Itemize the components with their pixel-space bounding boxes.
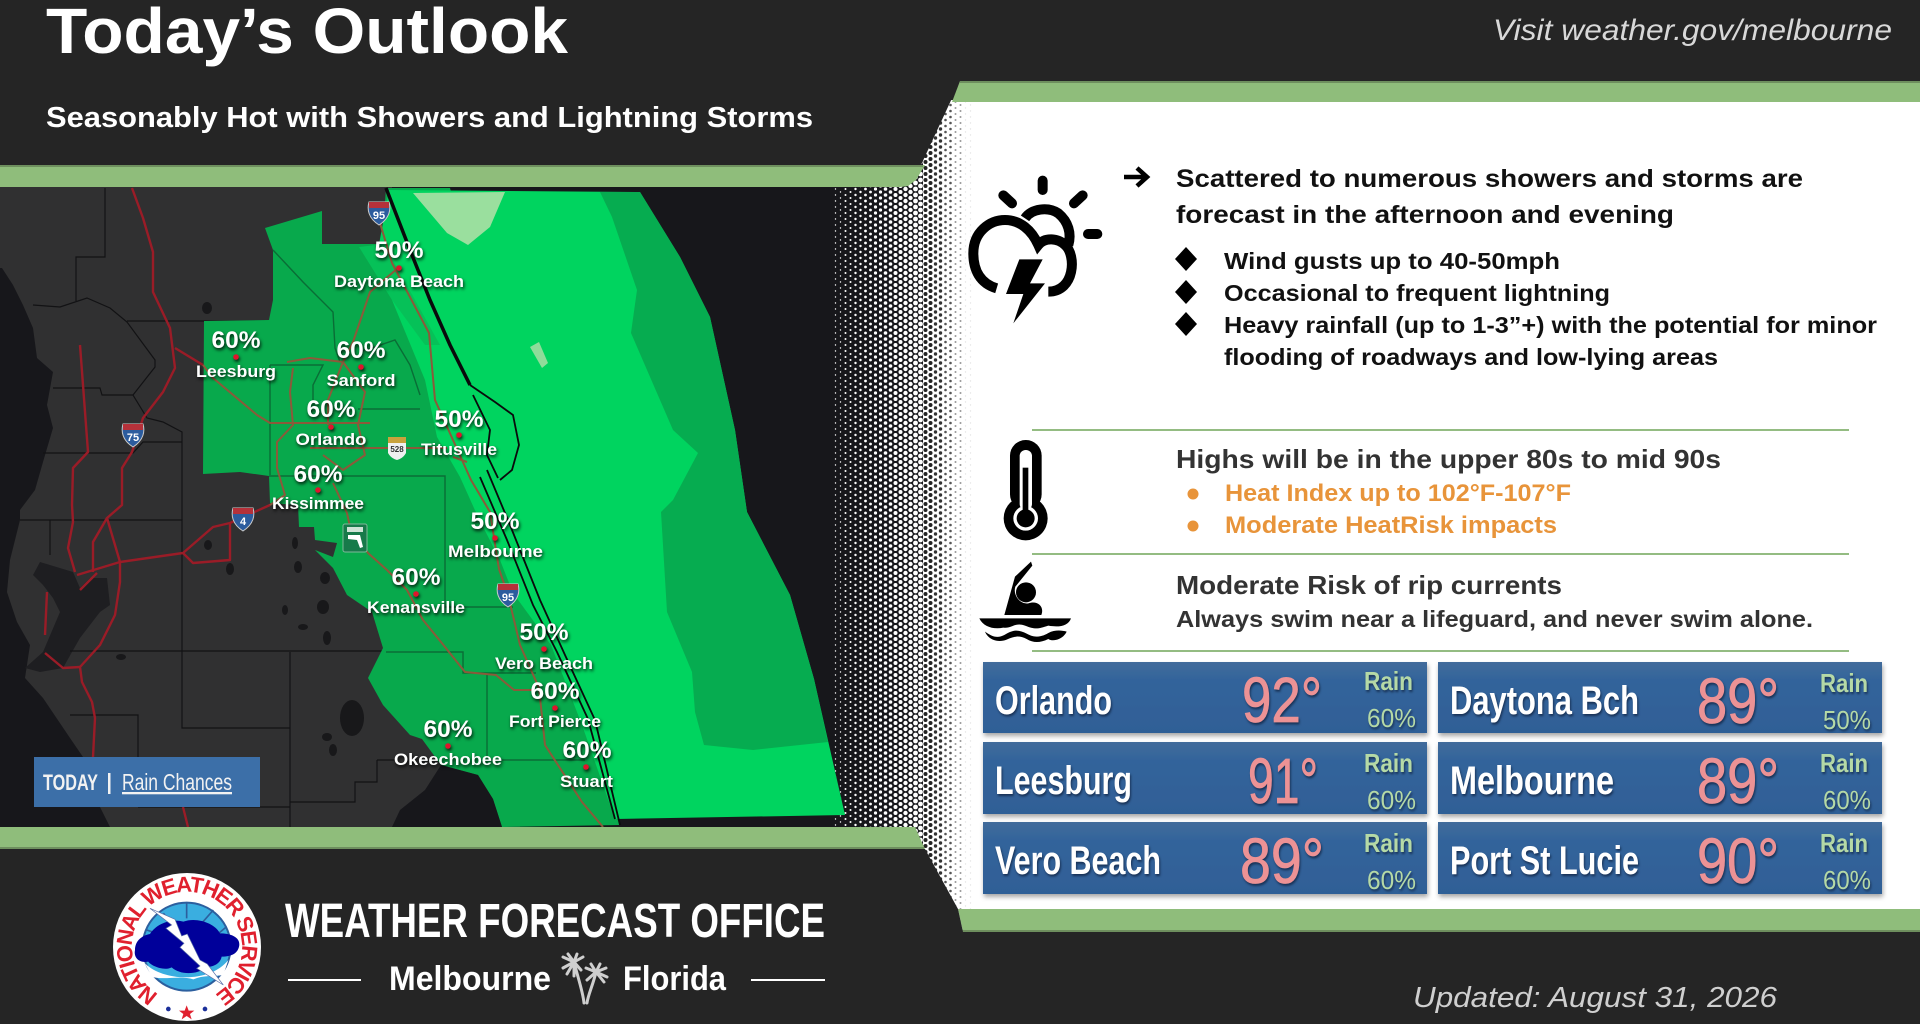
- label: Kissimmee: Kissimmee: [272, 494, 364, 513]
- city card: Port St Lucie: 60%: [1823, 865, 1871, 895]
- icon: interstate 4 shield: [232, 508, 254, 531]
- icon: route 528 shield: [388, 437, 406, 460]
- office location line: Florida: [623, 960, 727, 998]
- map tag: today rain chances: Rain Chances: [122, 769, 232, 795]
- city card: Orlando: 92°: [1242, 664, 1322, 736]
- header panel: [0, 0, 1920, 165]
- label: Titusville: Titusville: [421, 440, 497, 459]
- footer panel: [0, 849, 1920, 1024]
- label: Vero Beach: Vero Beach: [495, 654, 593, 673]
- label: Okeechobee: Okeechobee: [394, 750, 502, 769]
- map: pale lower-chance area: [413, 192, 505, 245]
- city card: Orlando: Rain: [1364, 666, 1413, 696]
- website link text: Visit weather.gov/melbourne: [1493, 14, 1892, 47]
- city card: Orlando: 60%: [1367, 703, 1416, 733]
- city card: Vero Beach: [983, 822, 1427, 897]
- icon: palm trees: [563, 954, 607, 1003]
- map tag: today rain chances: [34, 757, 260, 807]
- city card: Port St Lucie: 90°: [1697, 825, 1779, 897]
- label: Leesburg: 60%: [212, 327, 260, 354]
- storms text block: Scattered to numerous showers and storms are: [1176, 165, 1803, 193]
- icon: swimmer: [979, 562, 1071, 642]
- map: lines over green area: [269, 250, 585, 760]
- rip current text block: Always swim near a lifeguard, and never swim alone.: [1176, 606, 1813, 632]
- label: Okeechobee: [394, 716, 502, 769]
- map: highways on land: [45, 188, 270, 827]
- rip current text block: Moderate Risk of rip currents: [1176, 570, 1562, 600]
- city card: Daytona Bch: Rain: [1820, 668, 1868, 698]
- storms text block: forecast in the afternoon and evening: [1176, 201, 1674, 229]
- label: Leesburg: Leesburg: [196, 362, 276, 381]
- label: Vero Beach: 50%: [520, 619, 568, 646]
- city card: Daytona Bch: 89°: [1697, 665, 1779, 737]
- city card: Leesburg: 91°: [1248, 745, 1318, 817]
- storms text block: [1175, 165, 1877, 370]
- label: Fort Pierce: 60%: [530, 678, 580, 705]
- city card: Vero Beach: 89°: [1240, 825, 1324, 897]
- map: dark land: [0, 187, 520, 827]
- city card: Leesburg: Leesburg: [995, 759, 1132, 803]
- city card: Vero Beach: Vero Beach: [995, 839, 1161, 883]
- city card: Daytona Bch: Daytona Bch: [1450, 679, 1639, 723]
- icon: interstate 75 shield: 75: [127, 432, 139, 444]
- right panel bottom green stripe: [958, 909, 1920, 932]
- label: Sanford: Sanford: [326, 371, 396, 390]
- map: outer offshore band: [600, 192, 828, 750]
- city card: Vero Beach: Rain: [1364, 828, 1413, 858]
- storms text block: Wind gusts up to 40-50mph: [1224, 248, 1560, 274]
- icon: interstate 95 north shield: 95: [373, 210, 385, 222]
- map: gulf of mexico: [0, 268, 110, 827]
- city card: Leesburg: 60%: [1367, 785, 1416, 815]
- updated date: Updated: August 31, 2026: [1413, 982, 1778, 1014]
- map labels: [196, 237, 613, 791]
- heat text block: Highs will be in the upper 80s to mid 90s: [1176, 444, 1721, 474]
- map: lake okeechobee: [392, 765, 502, 827]
- label: Orlando: [296, 396, 366, 449]
- label: Titusville: [421, 406, 497, 459]
- label: Kenansville: [367, 564, 465, 617]
- city card: Melbourne: 89°: [1697, 745, 1779, 817]
- storms text block: Occasional to frequent lightning: [1224, 280, 1610, 306]
- label: Sanford: 60%: [336, 337, 386, 364]
- office location line: [288, 960, 825, 998]
- heat text block: [1176, 444, 1721, 539]
- map: inland lakes: [116, 302, 364, 756]
- icon: interstate 75 shield: [122, 424, 144, 447]
- map: tampa bay: [25, 562, 110, 672]
- label: Melbourne: 50%: [470, 508, 520, 535]
- city card: Daytona Bch: [1438, 662, 1882, 737]
- storms text block: Heavy rainfall (up to 1-3”+) with the potential for minor: [1224, 312, 1877, 338]
- map: land rain-chance area: [203, 188, 620, 827]
- map tag: today rain chances: TODAY: [43, 770, 98, 795]
- map: county lines on land: [20, 188, 395, 827]
- map: highways over green: [203, 223, 603, 827]
- label: Orlando: Orlando: [296, 430, 366, 449]
- city card: Melbourne: Rain: [1820, 748, 1868, 778]
- city card: Orlando: Orlando: [995, 679, 1112, 723]
- label: Daytona Beach: Daytona Beach: [334, 272, 464, 291]
- map: coastline: [386, 188, 620, 825]
- map: transition stripe: [359, 244, 440, 345]
- label: Titusville: 50%: [434, 406, 484, 433]
- label: Fort Pierce: Fort Pierce: [509, 712, 601, 731]
- icon: route 528 shield: 528: [390, 445, 404, 454]
- heat text block: Heat Index up to 102°F-107°F: [1225, 480, 1571, 507]
- halftone transition band: [833, 100, 973, 932]
- map: pale patch: [530, 342, 548, 368]
- city card: Port St Lucie: [1438, 822, 1882, 897]
- city card: Leesburg: Rain: [1364, 748, 1413, 778]
- label: Vero Beach: [495, 619, 593, 673]
- icon: interstate 4 shield: 4: [240, 516, 247, 528]
- city card: Melbourne: Melbourne: [1450, 759, 1614, 803]
- label: Daytona Beach: 50%: [374, 237, 424, 264]
- label: Kenansville: 60%: [392, 564, 440, 591]
- label: Okeechobee: 60%: [424, 716, 472, 743]
- rip current text block: [1176, 570, 1813, 632]
- office name wordmark: WEATHER FORECAST OFFICE: [285, 895, 825, 948]
- label: Stuart: 60%: [562, 737, 612, 764]
- header band: map top green stripe: [0, 165, 925, 187]
- icon: interstate 95 south shield: [497, 584, 519, 607]
- city card: Orlando: [983, 662, 1427, 736]
- label: Melbourne: Melbourne: [448, 542, 543, 561]
- map: offshore rain-chance area: [378, 190, 845, 819]
- icon: thermometer: [1004, 440, 1048, 540]
- city card: Port St Lucie: Port St Lucie: [1450, 839, 1639, 883]
- heat text block: Moderate HeatRisk impacts: [1225, 512, 1557, 539]
- label: Melbourne: [448, 508, 543, 561]
- right panel top green stripe: [952, 81, 1920, 102]
- label: Stuart: [560, 737, 613, 791]
- label: Orlando: 60%: [306, 396, 356, 423]
- arrow bullet: [1124, 168, 1147, 186]
- label: Fort Pierce: [509, 678, 601, 731]
- icon: nws logo: NATIONAL WEATHER SERVICE: [116, 876, 258, 1006]
- icon: florida turnpike sign: [343, 524, 367, 552]
- city card: Melbourne: 60%: [1823, 785, 1871, 815]
- city card: Leesburg: [983, 742, 1427, 817]
- rain chances map: [0, 187, 845, 827]
- icon: cloud sun lightning: [973, 181, 1097, 323]
- city card: Port St Lucie: Rain: [1820, 828, 1868, 858]
- label: Leesburg: [196, 327, 276, 381]
- subtitle: Seasonably Hot with Showers and Lightning Storms: [46, 102, 813, 134]
- storms text block: flooding of roadways and low-lying areas: [1224, 344, 1718, 370]
- icon: interstate 95 north shield: [368, 202, 390, 225]
- city card: Daytona Bch: 50%: [1823, 705, 1871, 735]
- city card: Vero Beach: 60%: [1367, 865, 1416, 895]
- label: Kissimmee: 60%: [294, 461, 342, 488]
- icon: interstate 95 south shield: 95: [502, 592, 514, 604]
- label: Kissimmee: [272, 461, 364, 513]
- white content panel background: [950, 100, 1920, 912]
- label: Sanford: [326, 337, 396, 390]
- label: Daytona Beach: [334, 237, 464, 291]
- footer green stripe: [0, 827, 925, 849]
- label: Kenansville: Kenansville: [367, 598, 465, 617]
- city card: Melbourne: [1438, 742, 1882, 817]
- label: Stuart: Stuart: [560, 772, 613, 791]
- office location line: Melbourne: [389, 960, 551, 998]
